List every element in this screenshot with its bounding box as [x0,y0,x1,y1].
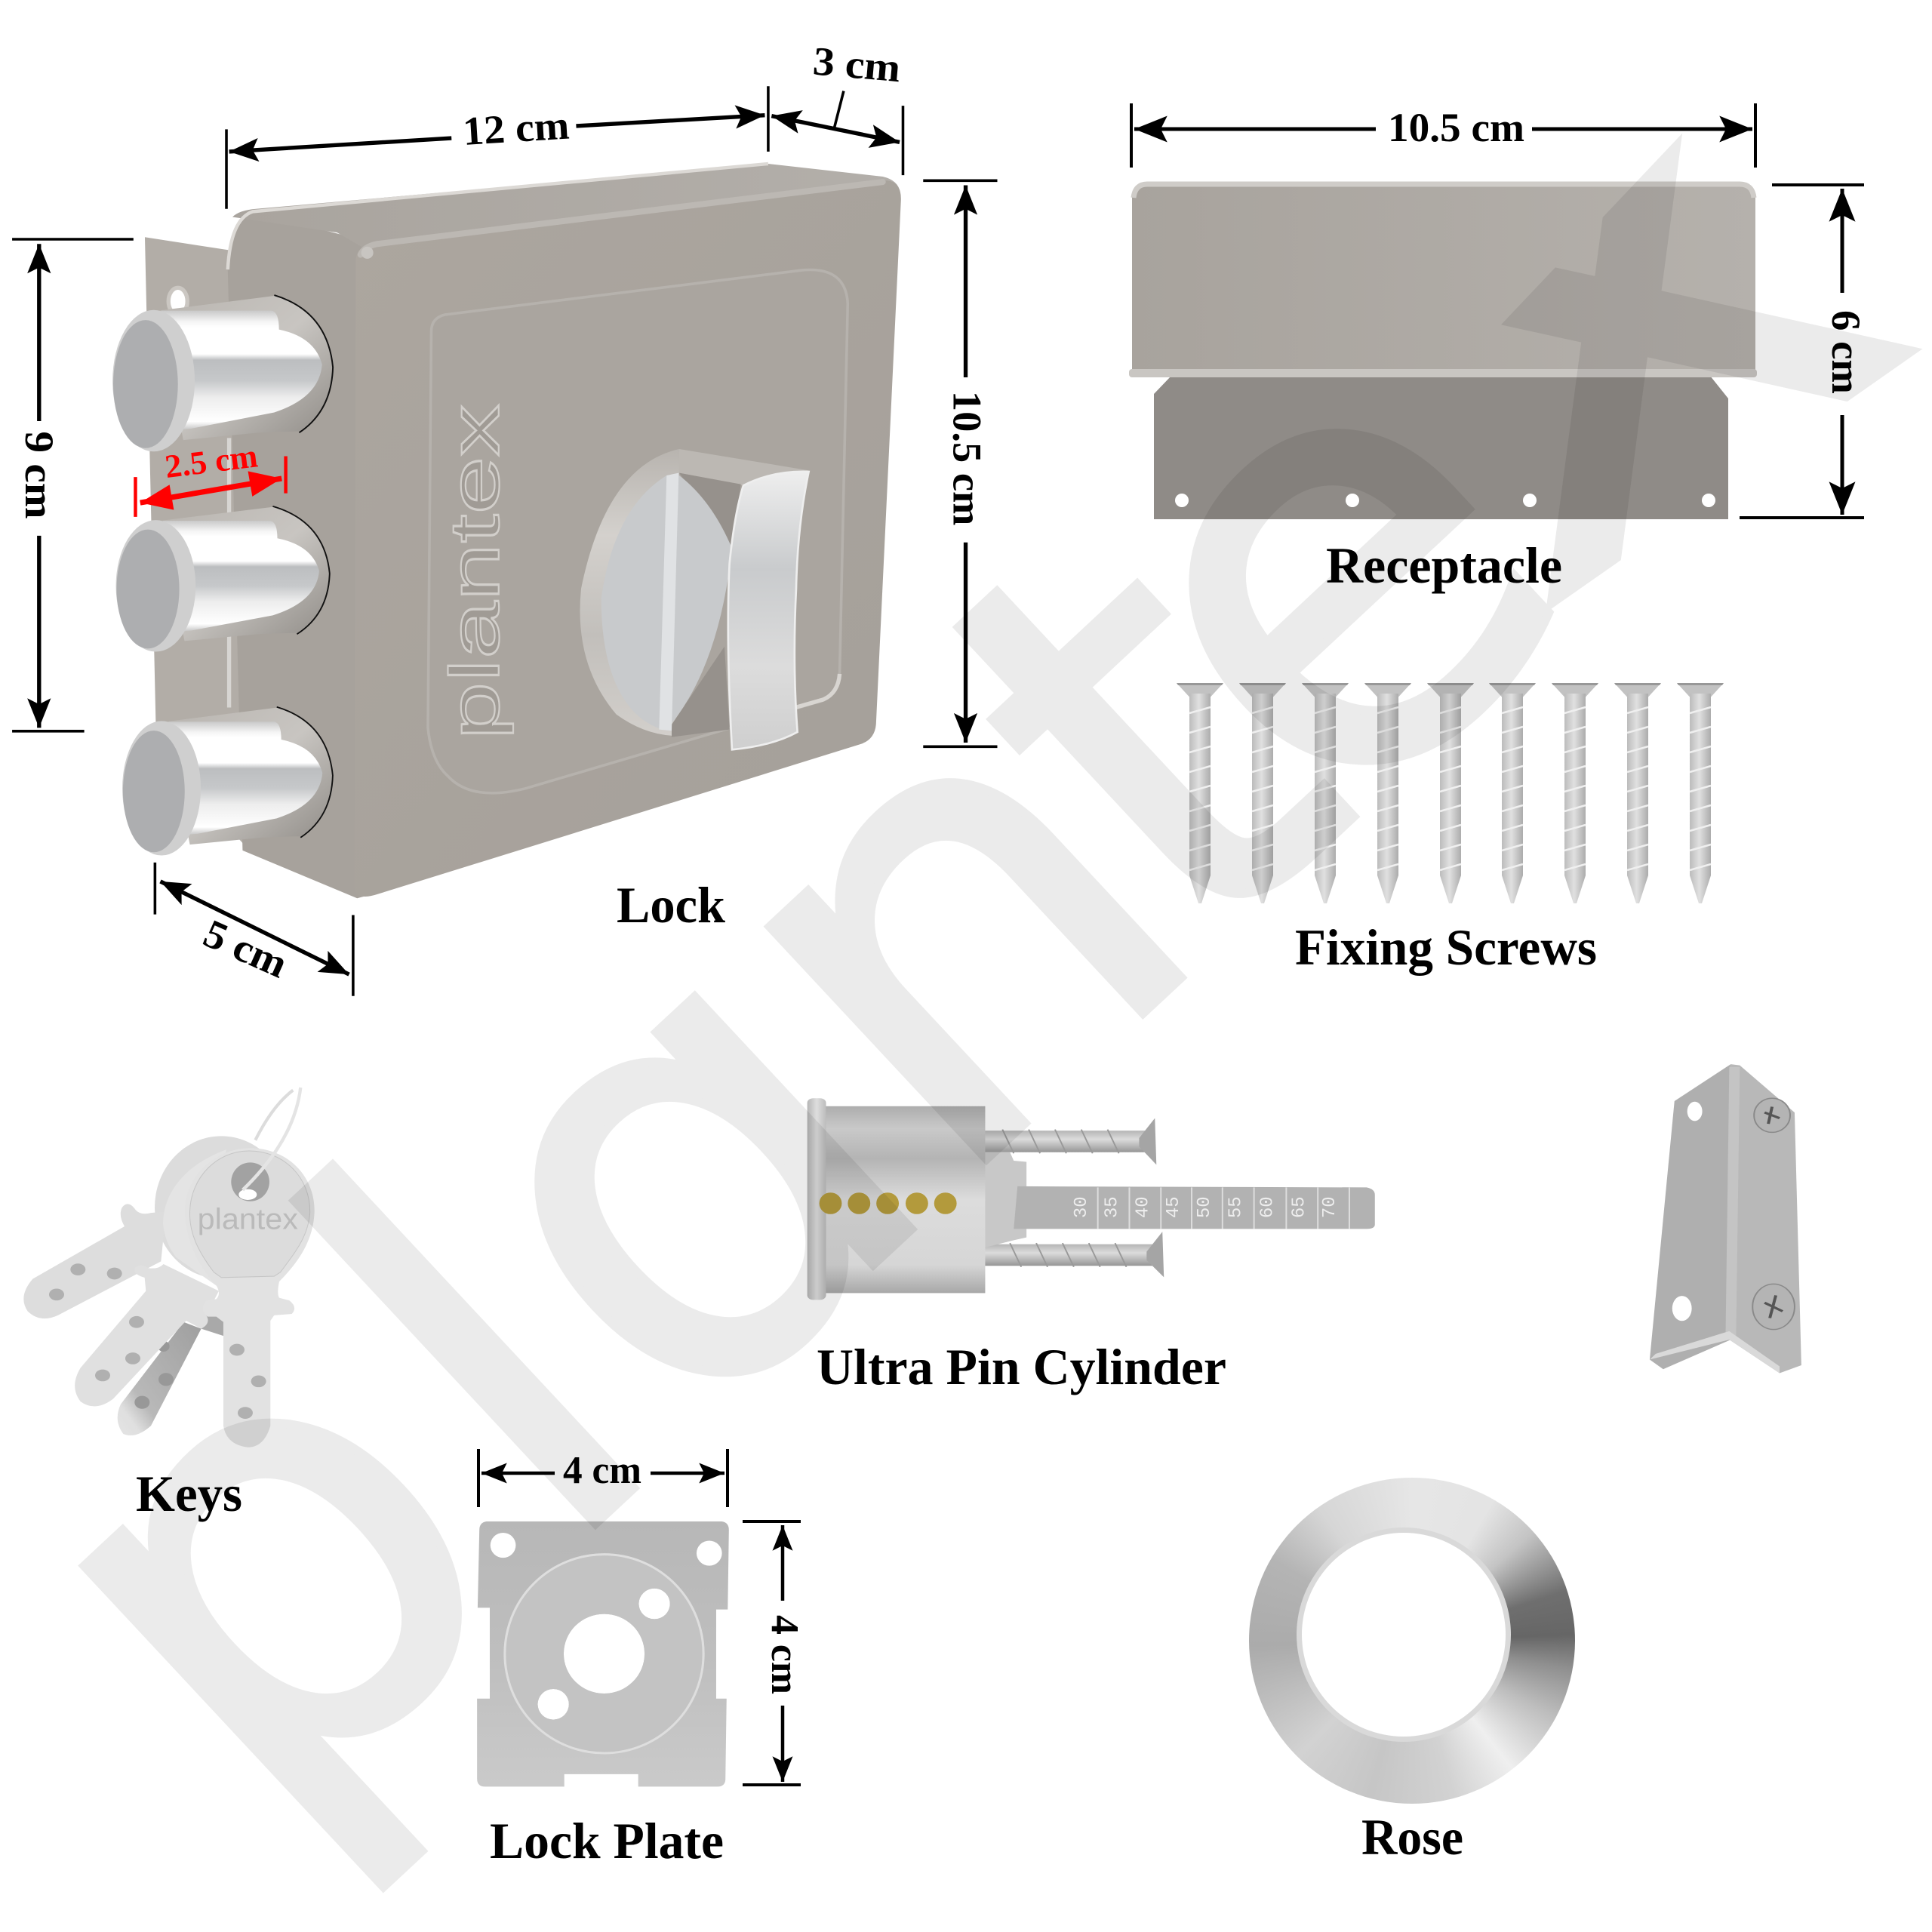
lock plate embossed disc [505,1555,703,1753]
bottom cylinder bolt [122,707,333,856]
third blade pits [134,1341,174,1409]
ultra pin cylinder [808,1098,1375,1395]
rose centre opening [1302,1533,1506,1737]
second key head arc [163,1149,226,1286]
bracket holes [1672,1102,1703,1321]
label Lock: Lock [617,876,725,934]
label Lock Plate: Lock Plate [490,1812,724,1869]
fixing screws [1177,683,1724,976]
label Rose: Rose [1361,1808,1463,1866]
dimension 4 cm height: 4 cm [763,1615,806,1694]
label Receptacle: Receptacle [1326,537,1562,594]
keys [23,1088,315,1522]
key logo: plantex [198,1202,298,1235]
middle cylinder bolt [116,506,330,652]
tail blade numbers: 45 [1164,1196,1184,1218]
plate mounting hole [168,288,187,315]
lock assembly [12,38,997,996]
tail blade numbers: 50 [1195,1196,1215,1218]
tail blade numbers: 40 [1133,1196,1153,1218]
bracket bend highlight [1730,1067,1734,1340]
left key blade [23,1204,166,1318]
recessed front panel [428,270,848,793]
panel corner highlight [795,674,840,708]
lock case front face [355,180,901,897]
receptacle plate holes [1175,494,1715,507]
dimension 9 cm [12,239,134,731]
dimension 5 cm [155,863,353,996]
thumb handle [728,472,809,749]
label Fixing Screws: Fixing Screws [1295,918,1597,976]
rose ring [1249,1478,1575,1804]
dark key behind [202,1312,226,1337]
dimension 3 cm [771,38,903,175]
dimension 6 cm: 6 cm [1823,310,1869,394]
tail blade numbers: 65 [1289,1196,1309,1218]
third key blade [118,1322,202,1435]
dimension 6 cm [1740,185,1869,518]
tail blade markings [1098,1187,1349,1229]
measuring tail blade [1014,1186,1375,1229]
dimension 2.5 cm in red: 2.5 cm [163,438,260,485]
second key blade [75,1264,219,1406]
receptacle [1129,103,1869,594]
lock case top [232,164,900,248]
dimension 10.5 cm height: 10.5 cm [944,391,989,525]
lock case side [228,211,377,898]
receptacle cover [1132,183,1755,371]
front key hole [231,1162,269,1201]
dimension 2.5 cm in red [135,438,286,517]
dimension 12 cm [226,86,768,209]
receptacle lower plate [1154,376,1728,519]
tail blade numbers: 60 [1258,1196,1278,1218]
rear key head [155,1136,288,1279]
tail blade numbers: 30 [1072,1196,1092,1218]
second blade pits [95,1316,144,1381]
row of nine screws [1177,683,1724,903]
corner sheen [361,247,374,259]
dimension 10.5 cm height [923,180,997,746]
front top edge highlight [361,182,883,255]
label Keys: Keys [136,1465,242,1522]
dimension 4 cm width: 4 cm [563,1449,641,1492]
knob slot [659,473,678,731]
dimension 9 cm: 9 cm [17,431,62,519]
receptacle top highlight [1134,184,1754,198]
plate slot between cylinders [227,438,232,708]
key ring strand front [243,1088,300,1190]
lock plate body [477,1521,729,1786]
label Ultra Pin Cylinder: Ultra Pin Cylinder [817,1338,1226,1395]
angle bracket [1650,1064,1801,1374]
lower mounting screw [983,1232,1164,1277]
dimension 5 cm: 5 cm [197,910,294,987]
top cylinder bolt [112,295,333,451]
dimension 3 cm: 3 cm [811,38,903,91]
knob lens face [601,475,732,731]
back plate of lock [145,237,249,851]
dimension 12 cm: 12 cm [461,102,571,154]
disc rim highlight [505,1555,703,1753]
dimension 10.5 cm width [1131,103,1755,168]
dimension 10.5 cm width: 10.5 cm [1388,105,1524,150]
cylinder barrel [819,1106,985,1293]
cylinder flange [808,1098,826,1300]
front key [185,1148,315,1447]
knob base disc [580,449,685,736]
collar behind cylinder [978,1152,1026,1249]
turn knob and handle [580,449,809,749]
bracket right leaf [1729,1064,1801,1374]
left blade pits [49,1263,122,1300]
tail blade numbers: 35 [1103,1196,1123,1218]
embossed logo: plantex [435,405,514,740]
tail blade numbers [1072,1196,1340,1218]
top edge highlight [228,164,768,269]
tail blade numbers: 55 [1226,1196,1247,1218]
knob top strip [679,449,809,485]
lock plate [477,1449,806,1869]
front key pits [229,1344,266,1419]
key pin dots [820,1192,957,1214]
tail blade numbers: 70 [1320,1196,1340,1218]
hole opening [238,1189,257,1200]
upper mounting screw [980,1118,1156,1164]
dimension 4 cm height [743,1521,806,1785]
dimension 4 cm width [478,1449,728,1507]
bracket lower edge [1650,1331,1780,1374]
key ring strand rear [255,1091,293,1140]
receptacle rim [1129,369,1757,377]
bracket left leaf [1650,1064,1730,1369]
front key head outline [189,1151,310,1278]
bracket screws [1752,1098,1795,1330]
knob recess [672,473,741,737]
